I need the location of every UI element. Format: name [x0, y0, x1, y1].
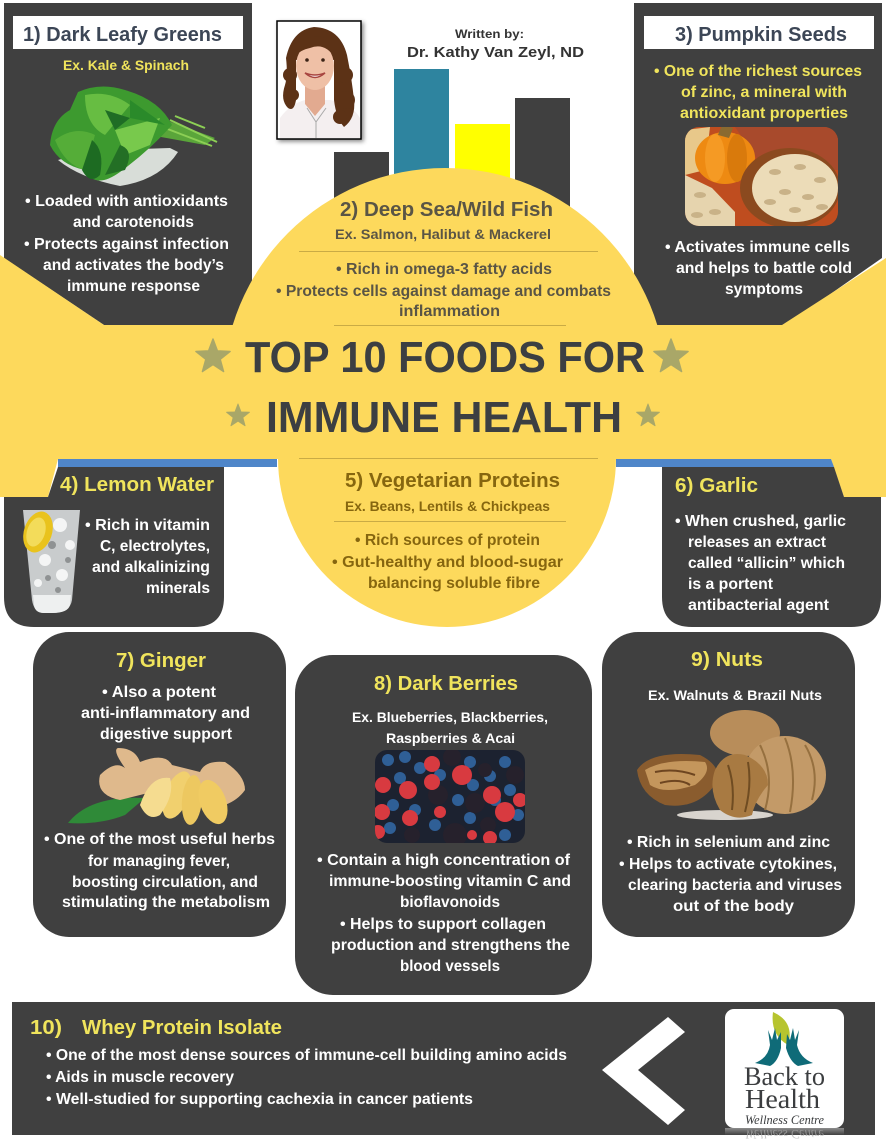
bullets	[46, 1047, 567, 1108]
yellow circle: vegetarian proteins	[278, 289, 616, 627]
bullet one: • Contain a high concentration of	[317, 852, 571, 869]
heading: 6) Garlic	[675, 475, 758, 497]
example: Ex. Kale & Spinach	[63, 57, 189, 73]
rule	[299, 458, 598, 459]
heading: 5) Vegetarian Proteins	[345, 470, 560, 492]
bullets	[24, 193, 229, 295]
heading: 9) Nuts	[691, 649, 763, 671]
panel 9 text: nuts	[619, 649, 842, 915]
icon: ginger root	[68, 748, 245, 828]
logo wordmark	[744, 1062, 825, 1127]
bullets: C, electrolytes,	[100, 538, 210, 555]
example: Ex. Blueberries, Blackberries,	[352, 709, 548, 725]
bullets: • Rich in selenium and zinc	[627, 834, 830, 851]
bullets: clearing bacteria and viruses	[628, 877, 842, 894]
panel 4 text: lemon water	[60, 474, 214, 597]
heading: 2) Deep Sea/Wild Fish	[340, 199, 553, 221]
panel 6 text: garlic	[675, 475, 846, 614]
panel 7 text: ginger	[44, 650, 275, 911]
heading: 10)	[30, 1017, 62, 1039]
bullet one	[81, 684, 250, 743]
panel 2 text: deep sea fish	[276, 199, 611, 326]
bullet two: • One of the most useful herbs	[44, 831, 275, 848]
bullets: • Rich in omega-3 fatty acids	[336, 261, 552, 278]
logo leaf	[773, 1012, 790, 1045]
portrait photo	[277, 21, 361, 139]
bullets: • Rich sources of protein	[355, 532, 540, 549]
icon: stars	[196, 339, 688, 426]
bullet two: stimulating the metabolism	[62, 894, 270, 911]
bullets: • Well-studied for supporting cachexia in cancer patients	[46, 1091, 473, 1108]
bullets: • Loaded with antioxidants	[25, 193, 228, 210]
bullets	[276, 261, 611, 320]
bullets: and carotenoids	[73, 214, 194, 231]
bullet one: • Also a potent	[102, 684, 216, 701]
bullet two: production and strengthens the	[331, 937, 570, 954]
title	[245, 333, 645, 442]
logo wordmark: Health	[745, 1084, 821, 1114]
panel: dark berries background	[295, 655, 592, 995]
logo: Back to Health Wellness Centre	[725, 1009, 844, 1142]
heading: 1) Dark Leafy Greens	[23, 24, 222, 46]
heading: 4) Lemon Water	[60, 474, 214, 496]
panel: pumpkin seeds background	[634, 3, 882, 325]
example	[352, 709, 548, 746]
example: Ex. Walnuts & Brazil Nuts	[648, 687, 822, 703]
heading box	[644, 16, 874, 49]
example: Raspberries & Acai	[386, 730, 515, 746]
bullets: and alkalinizing	[92, 559, 210, 576]
bullet one: anti-inflammatory and	[81, 705, 250, 722]
blue strip left	[58, 459, 277, 467]
panel 3 text: pumpkin seeds	[644, 16, 874, 298]
bullets	[332, 532, 563, 592]
bullet two: • Helps to support collagen	[340, 916, 546, 933]
icon: spinach bunch	[50, 86, 217, 186]
bullets: • Protects against infection	[24, 236, 229, 253]
panel: ginger background	[33, 632, 286, 937]
bullets: • When crushed, garlic	[675, 513, 846, 530]
heading: 3) Pumpkin Seeds	[675, 24, 847, 46]
icon: glass of lemon water	[18, 508, 80, 613]
bullets	[675, 513, 846, 614]
bullet one: digestive support	[100, 726, 232, 743]
bullets: • One of the most dense sources of immune-cell building amino acids	[46, 1047, 567, 1064]
bullets: inflammation	[399, 303, 500, 320]
bullets: • Gut-healthy and blood-sugar	[332, 554, 563, 571]
bar chart decoration	[334, 69, 570, 218]
example: Ex. Beans, Lentils & Chickpeas	[345, 498, 550, 514]
bullets: called “allicin” which	[688, 555, 845, 572]
title: TOP 10 FOODS FOR	[245, 333, 645, 382]
heading: 8) Dark Berries	[374, 673, 518, 695]
panel 10 text: whey protein isolate	[30, 1017, 567, 1108]
heading: Whey Protein Isolate	[82, 1017, 282, 1039]
bullets: • Protects cells against damage and combats	[276, 283, 611, 300]
bullet one	[317, 852, 571, 911]
panel: garlic background	[662, 467, 881, 627]
bullets: and activates the body’s	[43, 257, 224, 274]
bullets: out of the body	[673, 898, 794, 915]
bullets: • Helps to activate cytokines,	[619, 856, 837, 873]
yellow bullet: • One of the richest sources	[654, 63, 862, 80]
icon: walnuts	[637, 710, 826, 820]
yellow title banner	[0, 255, 886, 497]
bullets: • Aids in muscle recovery	[46, 1069, 234, 1086]
white bullet: • Activates immune cells	[665, 239, 850, 256]
heading: 7) Ginger	[116, 650, 206, 672]
white bullet	[665, 239, 852, 298]
bullets: balancing soluble fibre	[368, 575, 540, 592]
panel: nuts background	[602, 632, 855, 937]
panel: whey protein background	[12, 1002, 875, 1135]
bullet two: boosting circulation, and	[72, 874, 258, 891]
bullets	[619, 834, 842, 915]
image: mixed berries	[371, 748, 527, 847]
bullets: antibacterial agent	[688, 597, 829, 614]
bullets: is a portent	[688, 576, 773, 593]
image: pumpkin and seeds	[685, 125, 840, 228]
yellow bullet: antioxidant properties	[680, 105, 848, 122]
rule	[334, 325, 566, 326]
example: Ex. Salmon, Halibut & Mackerel	[335, 226, 551, 242]
bullets: immune response	[67, 278, 200, 295]
rule	[299, 251, 598, 252]
author credit: Written by:	[455, 27, 524, 41]
bullets: minerals	[146, 580, 210, 597]
bullet one: bioflavonoids	[400, 894, 500, 911]
author credit	[407, 27, 584, 61]
bullet two: blood vessels	[400, 958, 500, 975]
author credit: Dr. Kathy Van Zeyl, ND	[407, 45, 584, 61]
logo wordmark: Back to	[744, 1062, 825, 1091]
bullets	[85, 517, 210, 597]
bullets: • Rich in vitamin	[85, 517, 210, 534]
white bullet: and helps to battle cold	[676, 260, 852, 277]
yellow bullet: of zinc, a mineral with	[681, 84, 847, 101]
arrow: white chevron	[602, 1017, 685, 1125]
bullet one: immune-boosting vitamin C and	[329, 873, 571, 890]
rule	[334, 521, 566, 522]
bullet two: for managing fever,	[88, 853, 230, 870]
yellow circle: deep sea fish	[232, 168, 658, 325]
heading box	[13, 16, 243, 49]
bullet two	[44, 831, 275, 911]
white bullet: symptoms	[725, 281, 803, 298]
logo reflection: Wellness Centre	[745, 1127, 824, 1142]
panel 8 text: dark berries	[317, 673, 571, 975]
title: IMMUNE HEALTH	[266, 393, 622, 442]
panel: dark leafy greens background	[4, 3, 252, 325]
panel 1 text: dark leafy greens	[13, 16, 243, 295]
bullet two	[331, 916, 570, 975]
panel 5 text: vegetarian proteins	[299, 458, 598, 592]
yellow bullet	[654, 63, 862, 122]
logo wordmark: Wellness Centre	[745, 1112, 824, 1127]
blue strip right	[616, 459, 834, 467]
logo hands	[755, 1028, 813, 1066]
bullets: releases an extract	[688, 534, 826, 551]
panel: lemon water background	[4, 467, 224, 627]
